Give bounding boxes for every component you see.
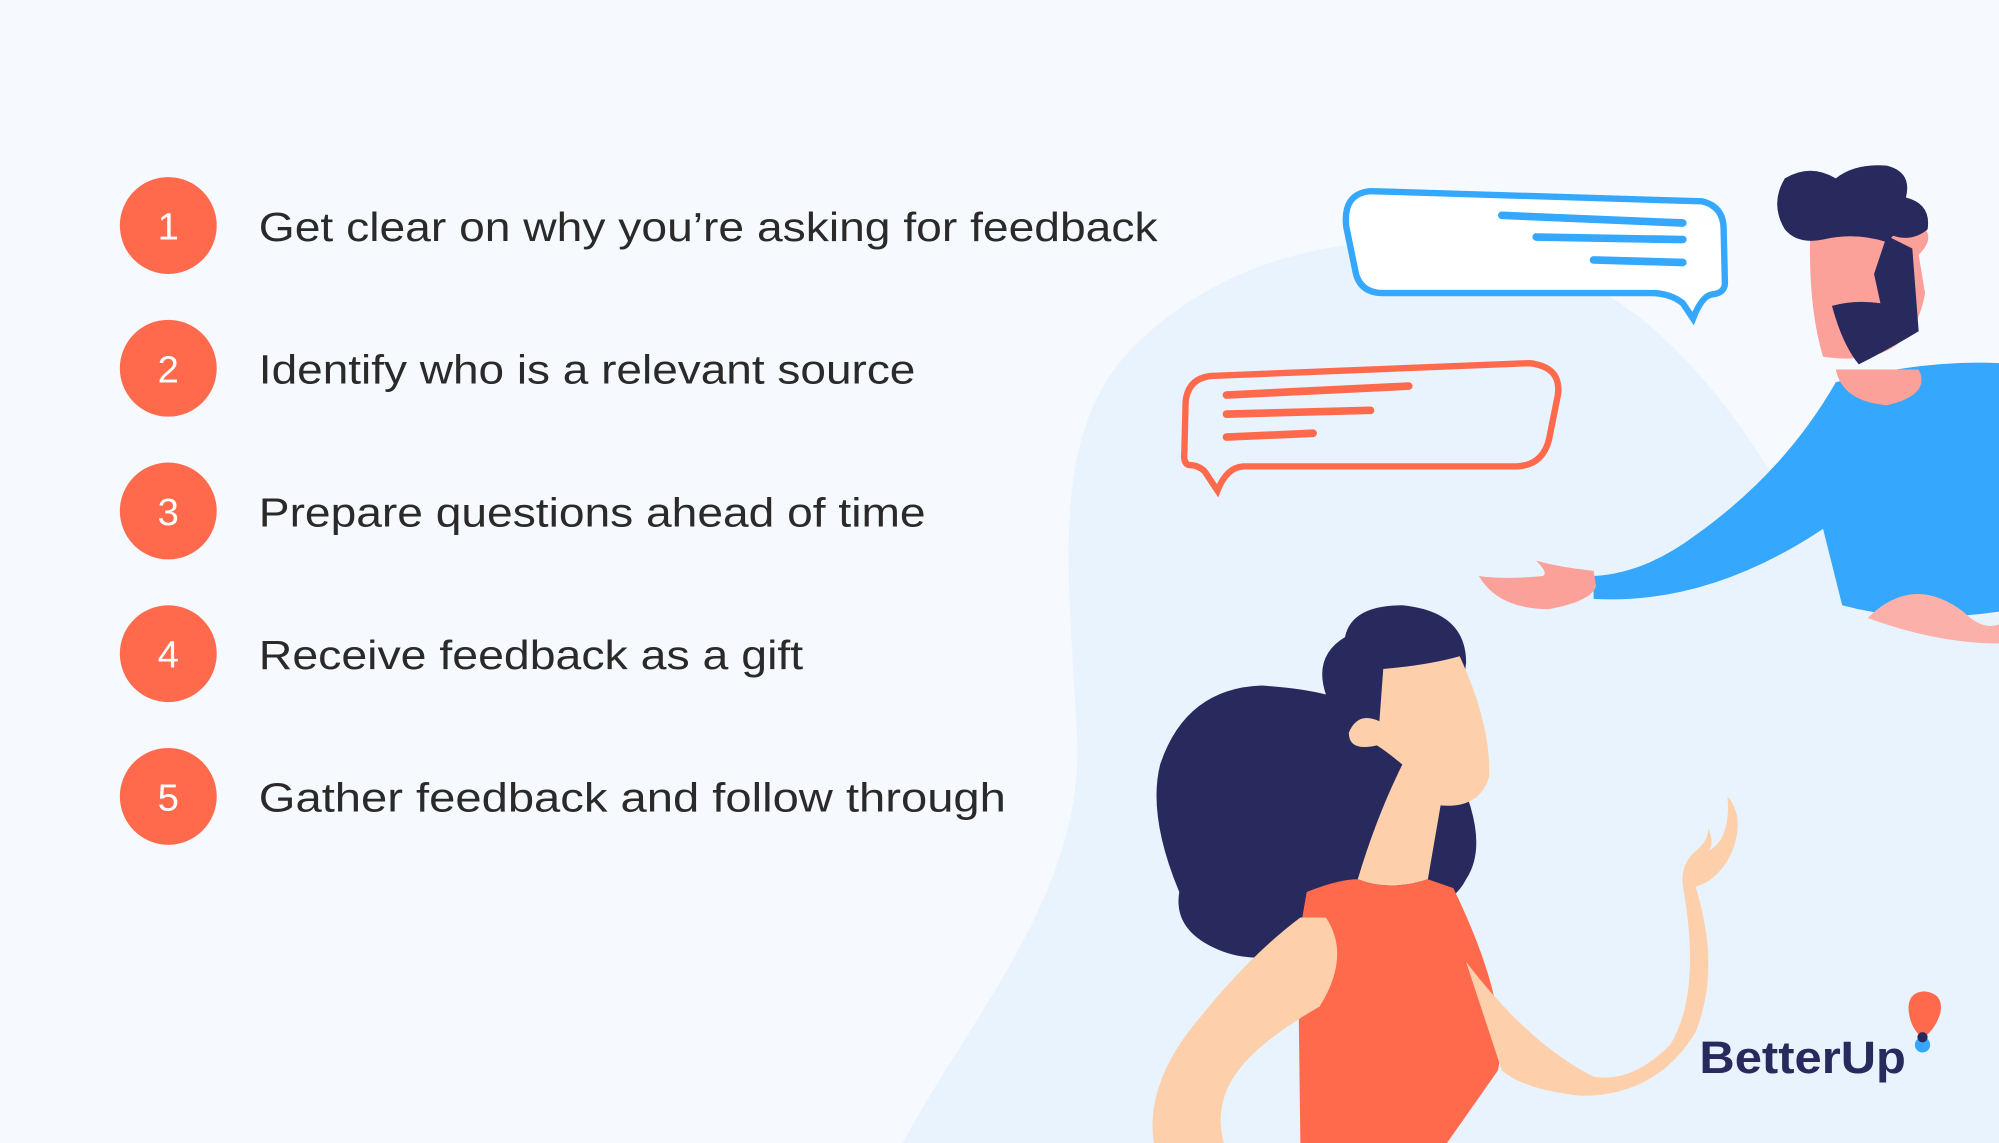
step 1: Get clear on why you’re asking for feedback [259,204,1158,250]
step 1: 1 [158,206,179,249]
step 5: Gather feedback and follow through [259,775,1006,821]
step 1 [120,177,1158,274]
step 2 [120,320,915,417]
step 4: Receive feedback as a gift [259,632,804,678]
step 2: Identify who is a relevant source [259,347,915,393]
step 3: Prepare questions ahead of time [259,489,926,535]
step 4 [120,605,804,702]
list: steps [120,177,1158,845]
illustration: woman [1152,605,1738,1143]
step 3: 3 [158,491,179,534]
step 5 [120,748,1006,845]
speech bubble: blue [1346,191,1725,319]
step 4: 4 [158,634,179,677]
logo: BetterUp [1699,991,1941,1083]
speech bubble: orange [1184,363,1558,491]
background blob [903,242,1999,1143]
step 3 [120,463,926,559]
logo: BetterUp: BetterUp [1699,1031,1906,1083]
step 5: 5 [158,776,179,819]
illustration: man [1479,165,1999,643]
step 2: 2 [158,348,179,391]
